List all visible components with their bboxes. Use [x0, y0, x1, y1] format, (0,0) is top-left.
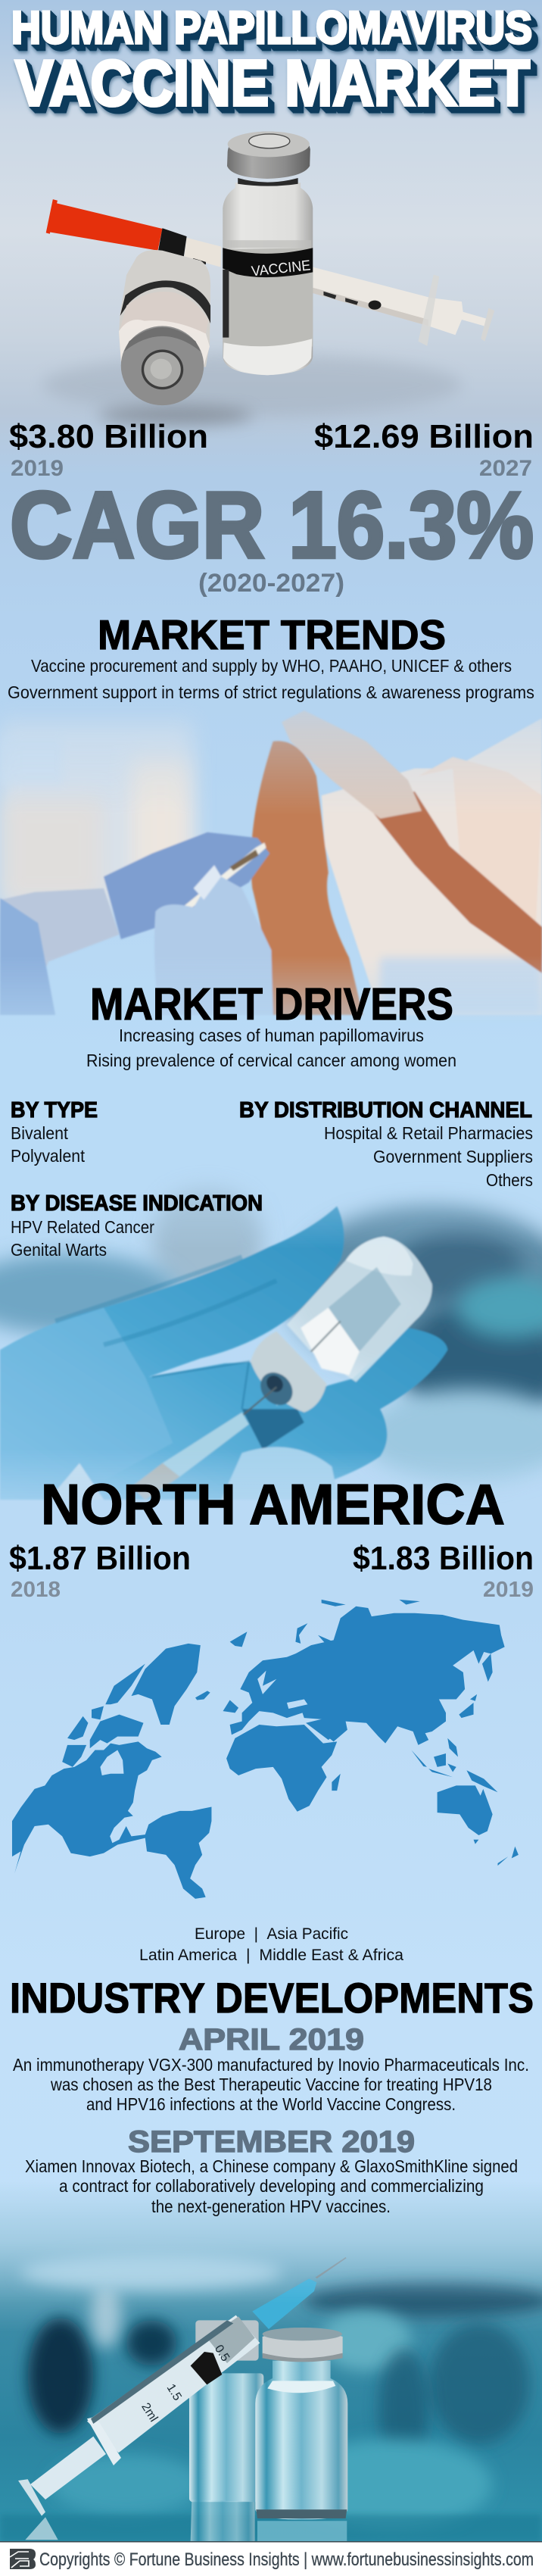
- development: september 2019: a contract for collaboratively developing and commercializing: [59, 2176, 484, 2196]
- syringe: 2ml: [139, 2401, 160, 2425]
- stat: 2018 north america: $1.87 Billion: [9, 1540, 191, 1577]
- stat: 2018 north america: [9, 1540, 191, 1602]
- glove: [0, 1206, 447, 1500]
- footer: [0, 2541, 542, 2576]
- segment: by distribution channel: Others: [486, 1170, 533, 1190]
- development: september 2019: SEPTEMBER 2019: [128, 2125, 415, 2159]
- segment: by type: [11, 1098, 98, 1166]
- syringe: [179, 842, 266, 913]
- patient arm: [251, 741, 363, 1015]
- segment: by disease indication: Genital Warts: [11, 1240, 107, 1260]
- heading: market drivers: MARKET DRIVERS: [90, 979, 453, 1029]
- vial label text: VACCINE: [251, 258, 311, 279]
- segment: by disease indication: [11, 1191, 263, 1260]
- photo: syringe and vials on teal: [0, 2181, 542, 2543]
- region list: Europe | Asia Pacific: [195, 1925, 348, 1943]
- stat: 2018 north america: 2018: [11, 1578, 61, 1602]
- icon: Fortune Business Insights logo: [10, 2549, 36, 2569]
- stat: 2019 market size: $3.80 Billion: [9, 418, 208, 455]
- development: april 2019: and HPV16 infections at the World Vaccine Congress.: [86, 2094, 456, 2114]
- segment: by distribution channel: [239, 1098, 533, 1190]
- title: [11, 2, 532, 120]
- segment: by type: Bivalent: [11, 1123, 69, 1143]
- Tasmania and New Zealand: [474, 1840, 519, 1866]
- segment: by distribution channel: BY DISTRIBUTION CHANNEL: [239, 1098, 532, 1123]
- segment: by disease indication: BY DISEASE INDICATION: [11, 1191, 263, 1216]
- stat: 2019 north america: 2019: [483, 1578, 534, 1602]
- syringe barrel: [46, 199, 494, 346]
- blurred room: [0, 718, 194, 911]
- stat: 2027 market size: [314, 418, 534, 481]
- second hand: [154, 873, 273, 1015]
- segment: by type: Polyvalent: [11, 1146, 86, 1166]
- back vial: [189, 2320, 263, 2542]
- heading: market drivers: Rising prevalence of cervical cancer among women: [86, 1051, 456, 1070]
- development: april 2019: [13, 2023, 529, 2114]
- stat: 2019 market size: [9, 418, 208, 481]
- development: september 2019: [25, 2125, 518, 2216]
- syringe: [18, 2257, 347, 2540]
- blurred background: [28, 2318, 93, 2434]
- blue glove: [104, 832, 269, 939]
- front vial: [255, 2328, 347, 2542]
- lower blurred knuckles: [221, 1447, 338, 1500]
- development: september 2019: the next-generation HPV vaccines.: [151, 2197, 391, 2216]
- Iceland and Atlantic islands: [195, 1631, 247, 1700]
- segment: by distribution channel: Government Suppliers: [373, 1147, 533, 1166]
- heading: market trends: [8, 611, 534, 702]
- Americas: [12, 1741, 211, 1899]
- heading: north america: NORTH AMERICA: [41, 1472, 505, 1536]
- Arctic islands: [62, 1664, 145, 1767]
- Sakhalin and Japan: [459, 1653, 493, 1718]
- photo: arm vaccination: [0, 710, 542, 1015]
- heading: market drivers: Increasing cases of human papillomavirus: [119, 1026, 424, 1045]
- Southeast Asia islands: [411, 1738, 498, 1792]
- heading: market drivers: [86, 979, 456, 1070]
- syringe: 1.5: [164, 2382, 184, 2403]
- syringe scale labels: 0.5: [212, 2343, 232, 2364]
- stat: 2027 market size: 2027: [479, 456, 532, 481]
- Arctic Russia islands: [295, 1600, 420, 1647]
- segment: by disease indication: HPV Related Cancer: [11, 1217, 154, 1237]
- segment: by type: BY TYPE: [11, 1098, 98, 1123]
- Eurasia: [230, 1606, 505, 1745]
- development: april 2019: APRIL 2019: [179, 2023, 364, 2056]
- stat: 2019 north america: [353, 1540, 534, 1602]
- Madagascar: [332, 1774, 341, 1791]
- stat: 2019 market size: 2019: [11, 456, 64, 481]
- Greenland: [132, 1644, 201, 1725]
- British Isles: [223, 1700, 238, 1713]
- development: april 2019: was chosen as the Best Therapeutic Vaccine for treating HPV18: [50, 2075, 492, 2094]
- vial: [251, 1237, 432, 1413]
- upright vial: [223, 132, 313, 375]
- region list: Latin America | Middle East & Africa: [139, 1947, 403, 1964]
- shirt: [322, 718, 542, 1015]
- world map: [12, 1600, 519, 1899]
- Australia: [438, 1785, 493, 1835]
- heading: market trends: MARKET TRENDS: [98, 611, 446, 658]
- stat: 2019 north america: $1.83 Billion: [353, 1540, 534, 1577]
- forearm and hand: [360, 792, 542, 973]
- Africa and Arabia: [226, 1718, 346, 1812]
- CAGR headline: (2020-2027): [198, 569, 344, 598]
- photo: vaccine vials and orange syringe: [42, 132, 494, 426]
- needle and syringe: [242, 1387, 276, 1416]
- blurred background: [287, 1203, 542, 1379]
- stat: 2027 market size: $12.69 Billion: [314, 418, 534, 455]
- photo: gloved hand with vial: [0, 1182, 542, 1500]
- region list: [139, 1925, 403, 1964]
- lying vial: [119, 250, 210, 405]
